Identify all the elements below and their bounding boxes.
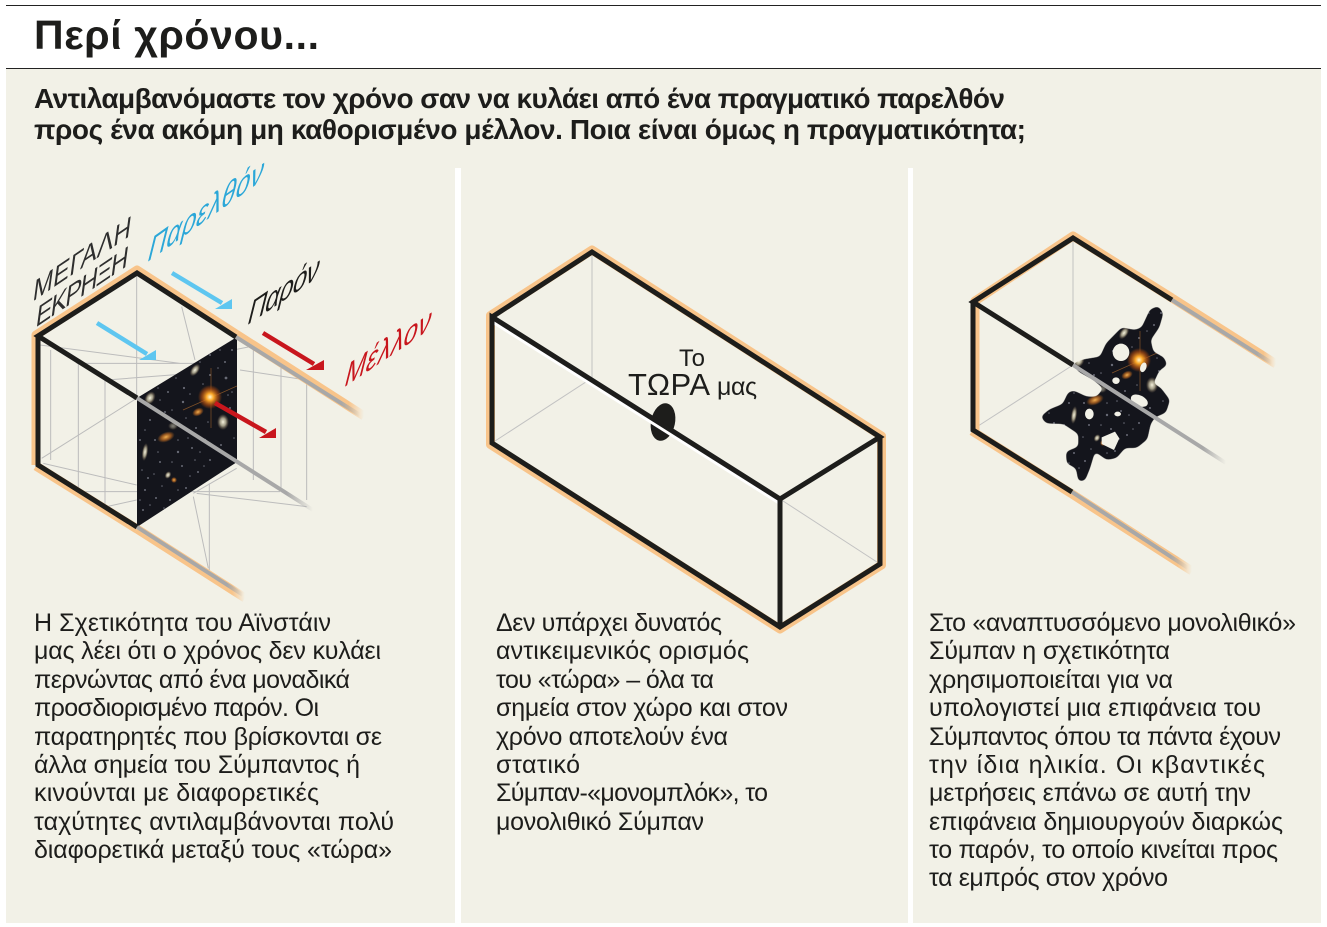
text block: growing block: υπολογιστεί μια επιφάνεια του <box>929 694 1261 722</box>
label: present: Παρόν <box>244 246 325 335</box>
text block: growing block: το παρόν, το οποίο κινείται προς <box>929 836 1278 864</box>
orange outline <box>490 250 882 629</box>
text block: growing block: χρησιμοποιείται για να <box>929 666 1173 694</box>
orange outline <box>972 236 1276 571</box>
text block: no objective now: του «τώρα» – όλα τα <box>496 666 714 694</box>
text block: no objective now: Δεν υπάρχει δυνατός <box>496 609 722 637</box>
title: Περί χρόνου... <box>34 12 319 58</box>
grey rails continuing in time <box>137 337 360 595</box>
black block edges <box>38 273 236 527</box>
label: our now: ΤΩΡΑ <box>628 367 710 402</box>
thin inner edges <box>492 252 880 564</box>
top rule <box>6 5 1321 6</box>
text block: growing block: Σύμπαντος όπου τα πάντα έχουν <box>929 723 1281 751</box>
intro text <box>34 83 1026 145</box>
galaxy blob surface <box>1042 307 1170 481</box>
panel: block universe with present slice <box>31 148 436 598</box>
column divider 1 <box>455 168 461 923</box>
text block: no objective now: αντικειμενικός ορισμός <box>496 637 749 665</box>
panel: closed block with our now <box>490 250 882 629</box>
text block: growing block <box>929 609 1296 892</box>
label: past: Παρελθόν <box>144 148 269 272</box>
text block: no objective now <box>496 609 788 836</box>
white highlight below centre line <box>492 321 780 503</box>
column divider 2 <box>908 168 913 923</box>
title rule <box>6 68 1321 69</box>
intro text: Αντιλαμβανόμαστε τον χρόνο σαν να κυλάει από ένα πραγματικό παρελθόν <box>34 83 1005 114</box>
text block: no objective now: μονολιθικό Σύμπαν <box>496 808 704 836</box>
text block: relativity: παρατηρητές που βρίσκονται σε <box>34 723 382 751</box>
text block: relativity: προσδιορισμένο παρόν. Οι <box>34 694 319 722</box>
thin inner edges <box>975 238 1073 428</box>
label: our now: μας <box>717 373 757 401</box>
arrow: present to future top <box>263 333 324 370</box>
black block edges <box>492 252 880 627</box>
label: future: Μέλλον <box>341 298 436 397</box>
panel: growing block universe <box>972 236 1276 571</box>
text block: growing block: επιφάνεια δημιουργούν διαρκώς <box>929 808 1283 836</box>
label: big bang: ΜΕΓΑΛΗ <box>31 209 133 309</box>
text block: relativity: κινούνται με διαφορετικές <box>34 779 319 807</box>
arrow: past to present top <box>172 273 232 309</box>
text block: growing block: τα εμπρός στον χρόνο <box>929 864 1168 892</box>
label: our now <box>628 345 757 402</box>
text block: relativity <box>34 609 394 864</box>
text block: growing block: την ίδια ηλικία. Οι κβαντικές <box>929 751 1265 779</box>
text block: no objective now: σημεία στον χώρο και στον <box>496 694 788 722</box>
text block: growing block: Στο «αναπτυσσόμενο μονολιθικό» <box>929 609 1296 637</box>
text block: relativity: περνώντας από ένα μοναδικά <box>34 666 350 694</box>
label: our now: Το <box>679 345 705 372</box>
text block: growing block: Σύμπαν η σχετικότητα <box>929 637 1170 665</box>
orange outline <box>36 270 364 598</box>
intro text: προς ένα ακόμη μη καθορισμένο μέλλον. Ποια είναι όμως η πραγματικότητα; <box>34 114 1026 145</box>
galaxy image slice <box>137 338 237 527</box>
text block: no objective now: χρόνο αποτελούν ένα <box>496 723 728 751</box>
grey rails continuing in time <box>1072 300 1272 568</box>
black block edges <box>973 238 1172 492</box>
arrow: past to present inside <box>97 323 156 360</box>
text block: relativity: διαφορετικά μεταξύ τους «τώρα» <box>34 836 392 864</box>
text block: no objective now: Σύμπαν-«μονομπλόκ», το <box>496 779 768 807</box>
label: big bang: ΕΚΡΗΞΗ <box>34 239 131 335</box>
arrow: present to future inside <box>215 403 276 438</box>
text block: growing block: μετρήσεις επάνω σε αυτή την <box>929 779 1251 807</box>
text block: no objective now: στατικό <box>496 751 580 779</box>
text block: relativity: Η Σχετικότητα του Αϊνστάιν <box>34 609 331 637</box>
thin grid lines of the block <box>40 273 307 570</box>
text block: relativity: ταχύτητες αντιλαμβάνονται πολύ <box>34 808 394 836</box>
text block: relativity: άλλα σημεία του Σύμπαντος ή <box>34 751 360 779</box>
text block: relativity: μας λέει ότι ο χρόνος δεν κυλάει <box>34 637 381 665</box>
our now marker <box>647 401 679 443</box>
